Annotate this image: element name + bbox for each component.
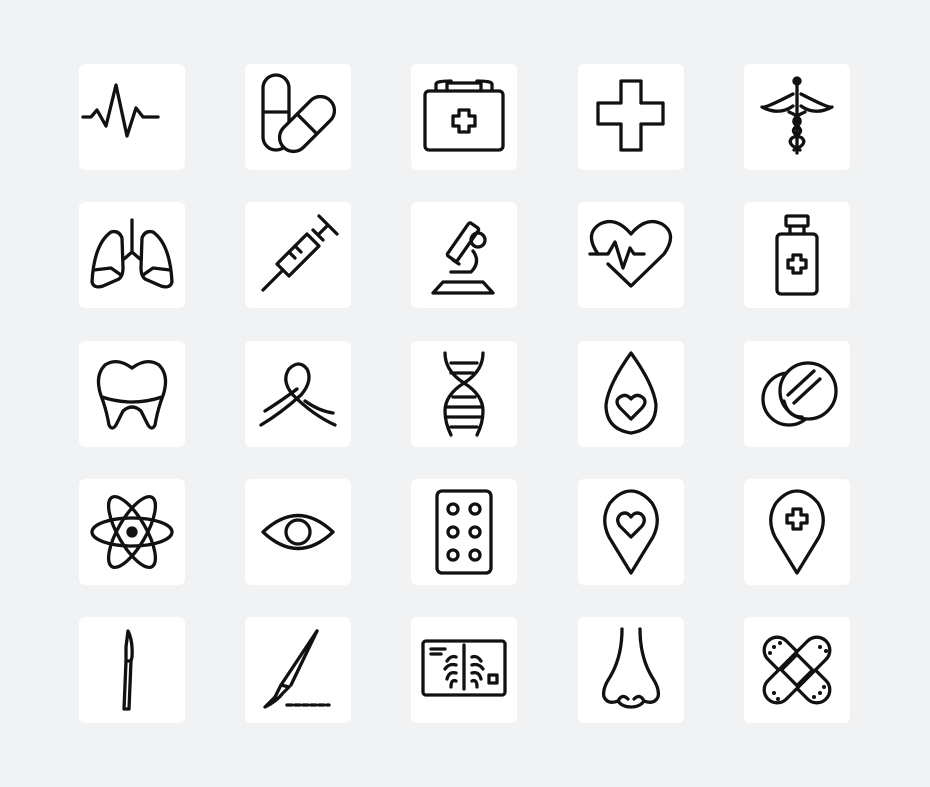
icon: scalpel xyxy=(79,617,185,723)
icon: pills xyxy=(245,64,351,170)
icon: atom xyxy=(79,479,185,585)
icon: tablets xyxy=(744,341,850,447)
icon: heart pulse xyxy=(578,202,684,308)
icon: cross xyxy=(578,64,684,170)
icon: medicine bottle xyxy=(744,202,850,308)
icon: syringe xyxy=(245,202,351,308)
icon: nose xyxy=(578,617,684,723)
icon: caduceus xyxy=(744,64,850,170)
icon: tooth xyxy=(79,341,185,447)
icon: ribbon xyxy=(245,341,351,447)
icon: x-ray xyxy=(411,617,517,723)
icon: pill blister xyxy=(411,479,517,585)
icon: location cross xyxy=(744,479,850,585)
icon: heartbeat xyxy=(79,64,185,170)
icon: first aid kit xyxy=(411,64,517,170)
icon: lungs xyxy=(79,202,185,308)
icon: dna xyxy=(411,341,517,447)
icon: microscope xyxy=(411,202,517,308)
icon: eye xyxy=(245,479,351,585)
icon: scalpel cutting xyxy=(245,617,351,723)
icon: blood drop heart xyxy=(578,341,684,447)
icon: location heart xyxy=(578,479,684,585)
icon: bandages xyxy=(744,617,850,723)
